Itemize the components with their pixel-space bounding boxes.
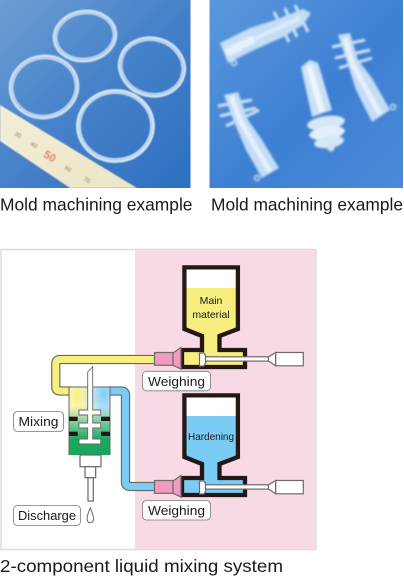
nozzle	[80, 455, 101, 501]
mixing shaft and paddles	[79, 367, 101, 444]
plug: top left	[220, 5, 311, 66]
label: mixing	[14, 412, 64, 432]
icon: discharge drop	[87, 508, 94, 523]
label: mixing: Mixing	[18, 414, 58, 429]
metering unit: upper	[154, 348, 303, 369]
ruler: 70	[82, 176, 91, 185]
panel: pink material zone	[135, 250, 315, 549]
label: weighing upper	[142, 371, 210, 391]
metering unit: lower	[154, 476, 303, 497]
caption: left photo: Mold machining example	[0, 194, 192, 214]
photo: silicone rings	[0, 0, 191, 188]
label: weighing lower	[142, 500, 210, 520]
label: hardening: Hardening	[188, 431, 234, 443]
plug: top right	[332, 33, 396, 122]
ruler: 40	[29, 142, 38, 150]
ruler	[0, 105, 137, 188]
photo: plastic plugs	[210, 0, 403, 188]
label: weighing lower: Weighing	[148, 503, 205, 518]
pipe: yellow main material	[56, 360, 156, 391]
ring: right	[113, 30, 191, 104]
ruler: 60	[63, 165, 72, 174]
pipe: blue hardener	[108, 391, 156, 486]
ring: top	[51, 7, 119, 65]
label: weighing upper: Weighing	[148, 374, 205, 389]
caption: mixing system: 2-component liquid mixing system	[0, 556, 283, 576]
panel: 2-component mixing diagram	[1, 250, 316, 550]
ruler: 50	[41, 149, 58, 165]
hopper: main material	[182, 267, 245, 367]
caption: right photo: Mold machining example	[211, 194, 403, 214]
label: main material: Main	[200, 295, 223, 307]
hopper: hardening	[182, 395, 245, 495]
mixer	[69, 367, 110, 455]
ruler: 30	[13, 132, 22, 140]
ring: left	[5, 51, 83, 123]
label: discharge: Discharge	[18, 508, 76, 523]
hopper: main material: material	[192, 309, 230, 321]
plug: lower left	[218, 92, 279, 180]
label: discharge	[14, 506, 80, 526]
ring: bottom	[78, 90, 154, 162]
plug: center	[301, 60, 346, 152]
